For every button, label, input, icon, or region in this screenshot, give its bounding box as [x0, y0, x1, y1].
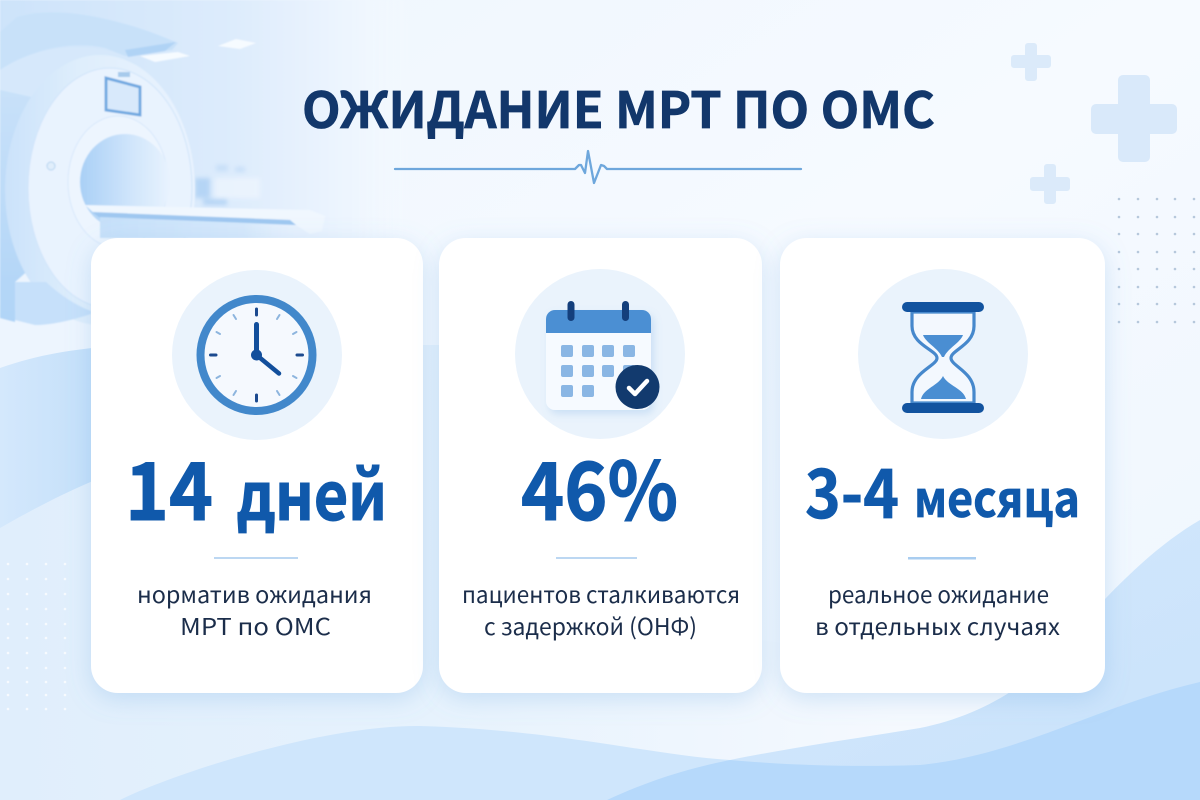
dot grid right [1118, 198, 1195, 323]
card background [780, 238, 1105, 693]
decorative plus: small lower [1030, 164, 1070, 204]
scanner front shell [5, 55, 195, 325]
value: 3-4 месяца: месяца [914, 460, 1080, 532]
inner face [28, 68, 192, 308]
divider [214, 557, 298, 559]
inner ring [68, 116, 168, 248]
panel: 14 days [91, 238, 423, 693]
icon: hourglass [858, 269, 1028, 439]
description: с задержкой (ОНФ) [484, 608, 697, 642]
left body side [0, 90, 45, 322]
description: в отдельных случаях [815, 608, 1061, 642]
background wave: bottom right dark [607, 682, 1200, 800]
room back wall [0, 0, 410, 238]
panel: 46 percent [439, 238, 762, 693]
description: реальное ожидание [828, 576, 1049, 610]
description [462, 576, 740, 642]
decorative plus: small top [1011, 43, 1051, 81]
icon: calendar [515, 269, 685, 439]
rear shell [0, 47, 125, 150]
description: норматив ожидания [137, 576, 372, 610]
background wave: left blue [0, 345, 120, 528]
value: 3-4 месяца: 3-4 [805, 439, 899, 538]
card background [439, 238, 762, 693]
icon: clock [172, 270, 342, 440]
MRI machine photo [0, 0, 410, 325]
card background [91, 238, 423, 693]
scanner bore [80, 134, 170, 230]
heartbeat divider [395, 151, 801, 183]
description [815, 576, 1061, 642]
description: пациентов сталкиваются [462, 576, 740, 610]
panel: 3-4 months [780, 238, 1105, 693]
divider [556, 557, 637, 559]
background wave: lower left light [0, 345, 1200, 800]
scanner display [106, 78, 140, 115]
floor under machine [0, 238, 91, 388]
description [137, 576, 372, 642]
background wave: bottom right light [607, 520, 1200, 800]
scanner knob [47, 162, 55, 170]
value: 14 дней: дней [237, 444, 387, 540]
control panels in background [195, 165, 260, 205]
value: 3-4 месяца [805, 439, 1080, 538]
patient table [85, 205, 325, 234]
scanner hood [0, 12, 178, 70]
divider [908, 557, 976, 560]
description: МРТ по ОМС [180, 608, 331, 642]
ceiling lights [140, 39, 256, 62]
decorative plus: large [1091, 75, 1177, 162]
scanner base [15, 282, 91, 325]
value: 14 дней: 14 [125, 428, 213, 544]
dot grid left [7, 563, 66, 710]
title: ОЖИДАНИЕ МРТ ПО ОМС [302, 71, 935, 143]
value: 14 дней [125, 428, 387, 544]
background wave: bottom left light [120, 726, 730, 800]
value: 46%: 46% [521, 428, 678, 544]
